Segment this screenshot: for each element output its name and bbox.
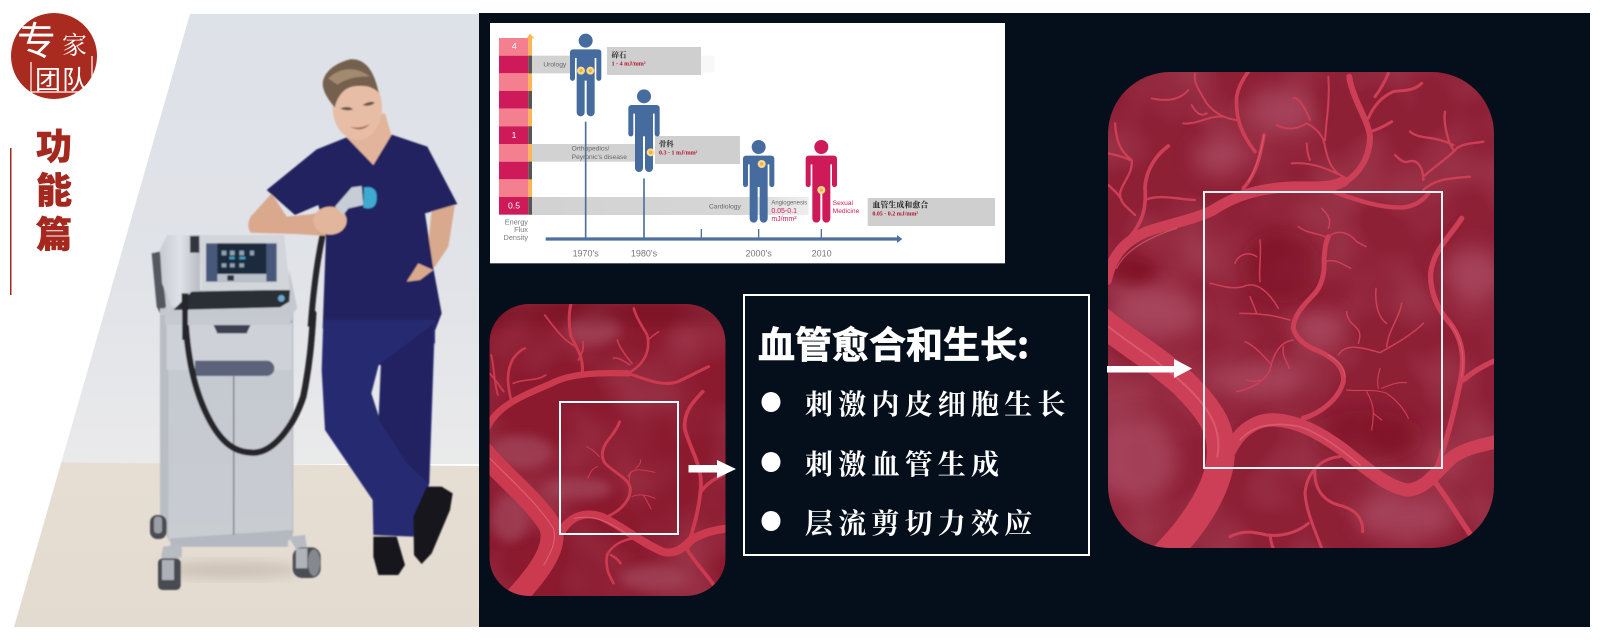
axis title: Density bbox=[504, 233, 528, 242]
axis title: Flux bbox=[514, 225, 528, 234]
large image highlight box bbox=[1204, 192, 1442, 468]
figure: urology bbox=[570, 34, 601, 116]
vessels bbox=[483, 305, 728, 600]
chart: shockwave energy flux density timeline bbox=[490, 23, 1005, 263]
dose callouts: 1 - 4 mJ/mm² bbox=[612, 62, 646, 68]
dose callouts: 碎石 bbox=[612, 50, 627, 60]
bullet: laminar shear stress: 层流剪切力效应 bbox=[805, 502, 1037, 542]
arrow to large image bbox=[1107, 359, 1192, 378]
panel: vascular healing text box bbox=[744, 295, 1089, 555]
device handpiece bbox=[335, 186, 377, 215]
dose callouts: 骨科 bbox=[659, 140, 674, 150]
person: hand bbox=[313, 207, 347, 235]
heading: 功能篇: 篇 bbox=[36, 206, 72, 258]
person: neck bbox=[347, 113, 392, 167]
person: trousers upper bbox=[433, 330, 436, 344]
indication labels: 0.05-0.1 bbox=[771, 208, 797, 215]
energy scale bar bbox=[499, 34, 534, 215]
indication labels: Cardiology bbox=[709, 203, 741, 210]
vessels bbox=[1100, 72, 1497, 557]
person: shoes bbox=[373, 487, 453, 575]
panel: small blood vessel illustration bbox=[483, 304, 728, 600]
figure: sexual medicine bbox=[806, 140, 837, 223]
indication labels: Orthopedics/ bbox=[572, 146, 610, 153]
indication labels: Sexual bbox=[833, 200, 854, 207]
timeline axis bbox=[546, 122, 902, 243]
axis title: Energy bbox=[505, 217, 528, 226]
indication labels: Medicine bbox=[833, 208, 860, 215]
cable from handpiece bbox=[311, 235, 323, 327]
arrow to text box bbox=[688, 460, 736, 478]
bullet: endothelial cell growth: 刺激内皮细胞生长 bbox=[805, 383, 1071, 423]
energy scale bar: 0.5 bbox=[508, 201, 520, 211]
machine head unit bbox=[152, 235, 297, 340]
decade labels: 2000's bbox=[746, 249, 772, 259]
text box heading: 血管愈合和生长: bbox=[758, 315, 1029, 369]
small image highlight box bbox=[560, 402, 678, 534]
decade labels: 2010 bbox=[812, 249, 832, 259]
person: right arm bbox=[428, 204, 456, 268]
indication labels: mJ/mm² bbox=[771, 216, 797, 223]
bullet: angiogenesis: 刺激血管生成 bbox=[805, 443, 1004, 483]
person: head bbox=[323, 59, 382, 140]
machine bbox=[150, 290, 321, 590]
photo: doctor with shockwave machine bbox=[0, 14, 479, 627]
heading: 功能篇: 能 bbox=[36, 162, 72, 214]
logo badge: 专家团队: 队 bbox=[62, 60, 88, 97]
person: trousers bbox=[322, 320, 435, 537]
dose callouts bbox=[612, 50, 928, 218]
dose callouts: 血管生成和愈合 bbox=[872, 200, 928, 211]
person: left arm bbox=[248, 193, 326, 237]
indication labels bbox=[543, 61, 860, 223]
dose callouts: 0.05 - 0.2 mJ/mm² bbox=[872, 212, 918, 218]
energy scale bar: 4 bbox=[512, 41, 517, 51]
indication labels: Urology bbox=[543, 61, 567, 68]
panel: large blood vessel illustration bbox=[1097, 72, 1503, 557]
dark panel bbox=[479, 13, 1590, 627]
dose callouts: 0.3 - 1 mJ/mm² bbox=[659, 151, 698, 157]
logo badge: 专家团队: 专 bbox=[17, 11, 56, 67]
figure: orthopedics bbox=[628, 89, 660, 172]
energy scale bar: 1 bbox=[512, 130, 517, 140]
logo badge: 专家团队 bbox=[11, 11, 97, 99]
machine wheels bbox=[150, 515, 321, 590]
heading: 功能篇: 功 bbox=[36, 118, 72, 170]
sidebar rule bbox=[10, 148, 12, 295]
person: scrub top bbox=[267, 135, 457, 331]
indication labels: Peyronic's disease bbox=[572, 154, 627, 161]
decade labels: 1970's bbox=[573, 249, 599, 259]
logo badge: 专家团队: 团 bbox=[35, 60, 61, 97]
indication labels: Angiogenesis bbox=[771, 200, 807, 206]
logo badge: 专家团队: 家 bbox=[62, 26, 87, 62]
figure: cardiology bbox=[743, 140, 774, 223]
machine cart body bbox=[160, 290, 293, 553]
machine cable bbox=[185, 310, 313, 453]
decade labels: 1980's bbox=[631, 249, 658, 259]
gray indication bands bbox=[532, 47, 995, 226]
